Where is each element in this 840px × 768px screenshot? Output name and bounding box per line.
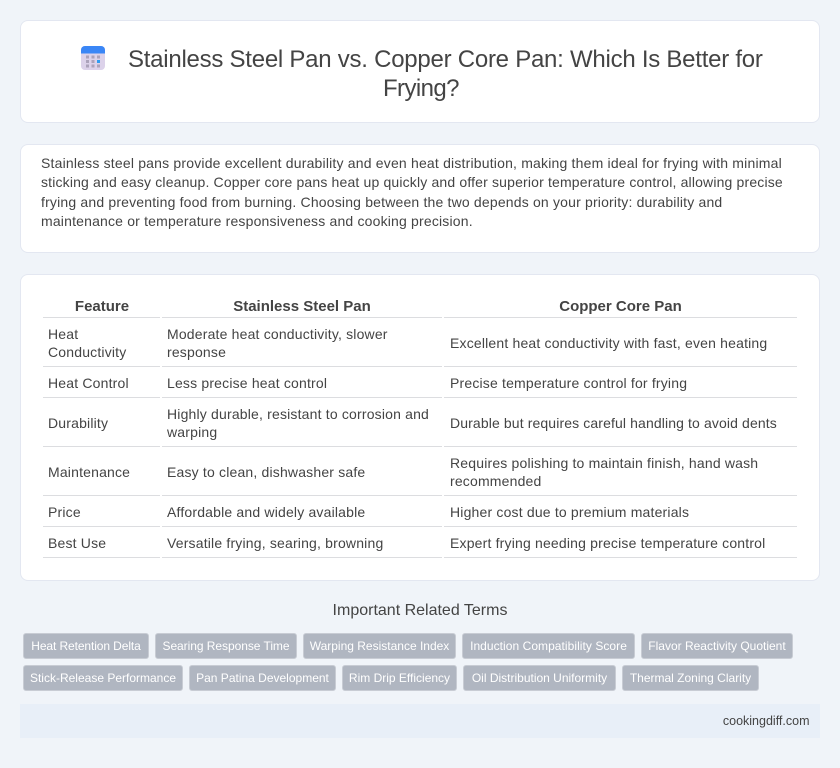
- text block: summary: [41, 155, 783, 229]
- text: Highly durable, resistant to corrosion and: [167, 406, 429, 422]
- footer bar: [20, 704, 820, 738]
- row: Best Use: Best Use: [48, 535, 106, 551]
- tag: Searing Response Time: Searing Response Time: [162, 639, 290, 653]
- tag: Flavor Reactivity Quotient: Flavor Reactivity Quotient: [648, 639, 786, 653]
- text block: summary: frying and preventing food from burning. Choosing between the two depends on your priority: durability and: [41, 194, 722, 210]
- text: Moderate heat conductivity, slower: [167, 326, 388, 342]
- row: Maintenance: Maintenance: [48, 464, 130, 480]
- row: Heat Conductivity: Heat: [48, 326, 78, 342]
- text: Less precise heat control: [167, 375, 327, 391]
- tag: Oil Distribution Uniformity: Oil Distribution Uniformity: [472, 671, 607, 685]
- text: recommended: [450, 473, 541, 489]
- text block: summary: maintenance or temperature responsiveness and cooking precision.: [41, 213, 473, 229]
- heading: Important Related Terms: Important Related Terms: [333, 602, 507, 619]
- icon: calendar: [81, 46, 105, 70]
- text: Requires polishing to maintain finish, hand wash: [450, 455, 758, 471]
- tag: Rim Drip Efficiency: Rim Drip Efficiency: [349, 671, 450, 685]
- text: Expert frying needing precise temperature control: [450, 535, 765, 551]
- row: Heat Conductivity: [48, 326, 126, 360]
- row: Heat Control: Heat Control: [48, 375, 129, 391]
- tag: Rim Drip Efficiency: [342, 665, 457, 691]
- tag: Stick-Release Performance: Stick-Release Performance: [30, 671, 176, 685]
- text: Higher cost due to premium materials: [450, 504, 689, 520]
- tag: Flavor Reactivity Quotient: [641, 633, 793, 659]
- tag: Thermal Zoning Clarity: [622, 665, 759, 691]
- tag: Pan Patina Development: [189, 665, 336, 691]
- tag: Warping Resistance Index: [303, 633, 456, 659]
- panel: summary card: [20, 144, 820, 253]
- title: Frying?: [383, 75, 459, 102]
- tag: Warping Resistance Index: Warping Resistance Index: [310, 639, 449, 653]
- row: Heat Conductivity: Conductivity: [48, 344, 126, 360]
- title: [128, 46, 763, 102]
- row: Durability: Durability: [48, 415, 108, 431]
- footer text: cookingdiff.com: cookingdiff.com: [723, 714, 810, 728]
- tag: Heat Retention Delta: Heat Retention Delta: [31, 639, 141, 653]
- text: Easy to clean, dishwasher safe: [167, 464, 365, 480]
- tag: Stick-Release Performance: [23, 665, 183, 691]
- table header: Feature: Feature: [75, 298, 129, 315]
- table header: Copper Core Pan: Copper Core Pan: [559, 298, 682, 315]
- tag: Induction Compatibility Score: Induction Compatibility Score: [470, 639, 627, 653]
- tag: Heat Retention Delta: [23, 633, 149, 659]
- text: Durable but requires careful handling to avoid dents: [450, 415, 777, 431]
- tag: Pan Patina Development: Pan Patina Development: [196, 671, 329, 685]
- text: Precise temperature control for frying: [450, 375, 687, 391]
- text block: summary: sticking and easy cleanup. Copper core pans heat up quickly and offer superior temperature control, allowing precise: [41, 174, 783, 190]
- text block: summary: Stainless steel pans provide excellent durability and even heat distribution, making them ideal for frying with minimal: [41, 155, 782, 171]
- tag: Searing Response Time: [155, 633, 297, 659]
- text: warping: [167, 424, 217, 440]
- text: Excellent heat conductivity with fast, even heating: [450, 335, 767, 351]
- tag: Oil Distribution Uniformity: [463, 665, 616, 691]
- panel: title card: [20, 20, 820, 123]
- text: response: [167, 344, 226, 360]
- row: Price: Price: [48, 504, 81, 520]
- text: Versatile frying, searing, browning: [167, 535, 383, 551]
- tag: Thermal Zoning Clarity: Thermal Zoning Clarity: [630, 671, 751, 685]
- table header: Stainless Steel Pan: Stainless Steel Pan: [233, 298, 371, 315]
- tag: Induction Compatibility Score: [462, 633, 635, 659]
- text: Affordable and widely available: [167, 504, 365, 520]
- panel: comparison table: [20, 274, 820, 581]
- title: Stainless Steel Pan vs. Copper Core Pan: Which Is Better for: [128, 46, 763, 73]
